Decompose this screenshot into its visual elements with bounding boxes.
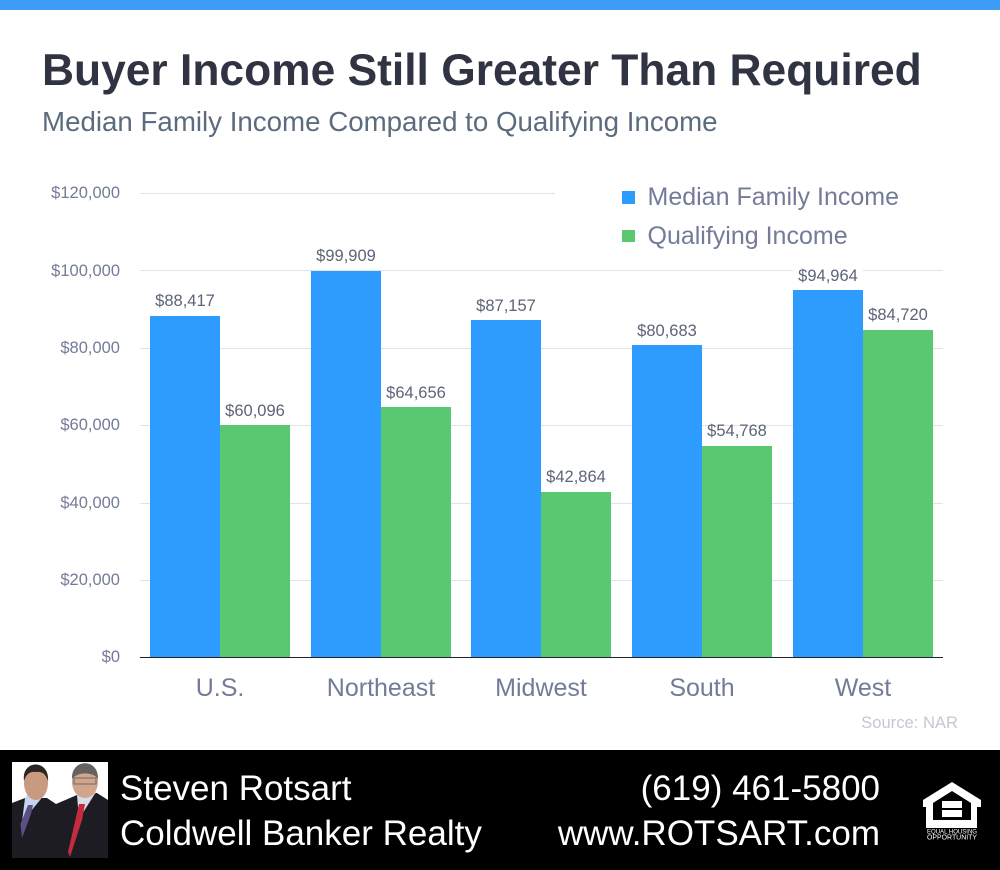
value labels: $88,417 (155, 292, 215, 310)
subtitle: Median Family Income Compared to Qualifying Income (42, 106, 718, 137)
icon: equal housing opportunity (923, 782, 981, 842)
bars: median family income (150, 271, 863, 657)
y axis labels: $80,000 (60, 339, 120, 357)
value labels: $54,768 (707, 422, 767, 440)
y axis labels: $120,000 (51, 184, 120, 202)
website: www.ROTSART.com (558, 814, 880, 853)
bar chart (51, 183, 958, 732)
value labels: $64,656 (386, 384, 446, 402)
bars: qualifying income (220, 330, 933, 657)
value labels (155, 247, 928, 486)
icon: equal housing opportunity: OPPORTUNITY (927, 834, 977, 842)
top accent bar (0, 0, 1000, 10)
x axis labels: South (669, 674, 735, 702)
agent name: Steven Rotsart (120, 769, 352, 808)
brokerage name: Coldwell Banker Realty (120, 814, 482, 853)
y axis labels: $0 (102, 648, 120, 666)
value labels: $80,683 (637, 322, 697, 340)
value labels: $87,157 (476, 297, 536, 315)
x axis labels: Northeast (327, 674, 435, 702)
value labels: $94,964 (798, 267, 858, 285)
value labels: $42,864 (546, 468, 606, 486)
y axis labels: $60,000 (60, 416, 120, 434)
x axis labels: Midwest (495, 674, 587, 702)
baseline (140, 656, 943, 658)
footer bar (0, 750, 1000, 870)
title: Buyer Income Still Greater Than Required (42, 46, 922, 95)
value labels: $60,096 (225, 402, 285, 420)
value label backing (793, 262, 863, 282)
x axis labels: U.S. (196, 674, 244, 702)
y axis labels (51, 184, 120, 666)
y axis labels: $20,000 (60, 571, 120, 589)
value labels: $99,909 (316, 247, 376, 265)
agent photo (12, 762, 108, 858)
y axis labels: $100,000 (51, 262, 120, 280)
x axis labels: West (835, 674, 891, 702)
source note: Source: NAR (861, 713, 958, 732)
icon: equal housing opportunity: EQUAL HOUSING (927, 830, 977, 836)
phone number: (619) 461-5800 (641, 769, 880, 808)
x axis labels (196, 674, 891, 702)
value labels: $84,720 (868, 306, 928, 324)
y axis labels: $40,000 (60, 494, 120, 512)
legend: Qualifying Income (648, 222, 848, 250)
legend (622, 183, 899, 250)
legend: Median Family Income (648, 183, 899, 211)
